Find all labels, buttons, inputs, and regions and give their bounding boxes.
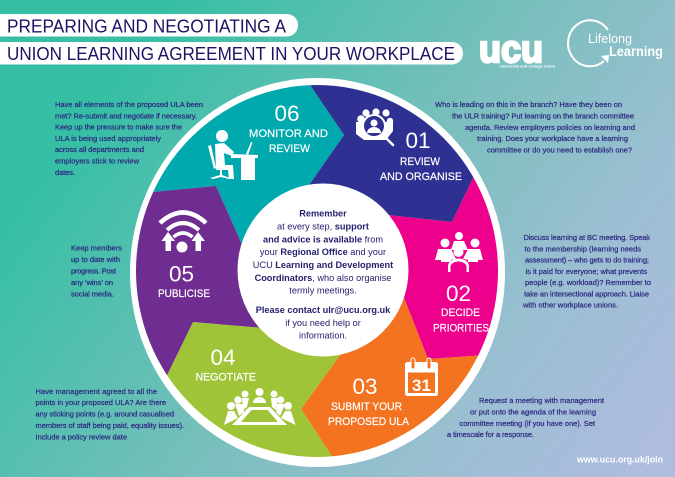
text: negotiate advice: members of staff being paid, equality issues). <box>36 421 184 430</box>
text: review and organise advice <box>435 100 635 154</box>
text: submit proposed ULA advice: or put onto the agenda of the learning <box>470 407 596 416</box>
text: decide priorities advice: take an intersectional approach. Liaise <box>524 290 649 299</box>
centre circle: information. <box>299 330 347 340</box>
text: review and organise advice: training. Does your workplace have a learning <box>477 134 628 143</box>
title: PREPARING AND NEGOTIATING A <box>7 16 286 37</box>
label: 03 submit your proposed ULA: SUBMIT YOUR <box>331 401 402 413</box>
icon: wifi broadcast <box>160 212 206 252</box>
label: 02 decide priorities <box>433 281 489 334</box>
text: monitor and review advice: dates. <box>55 168 75 177</box>
text: review and organise advice: committee or do you need to establish one? <box>487 145 632 154</box>
text: publicise advice: any ‘wins’ on <box>71 278 113 287</box>
text: submit proposed ULA advice: a timescale for a response. <box>447 430 534 439</box>
label: 02 decide priorities: DECIDE <box>441 307 480 319</box>
text: submit proposed ULA advice: committee meeting (if you have one). Set <box>460 419 596 428</box>
text: negotiate advice: any sticking points (e.g. around casualised <box>36 410 174 419</box>
icon: calendar 31: 31 <box>412 376 431 395</box>
centre circle: Please contact ulr@ucu.org.uk <box>256 305 391 315</box>
label: 05 publicise <box>158 262 210 300</box>
text: publicise advice: social media. <box>71 289 114 298</box>
centre circle: termly meetings. <box>289 286 357 296</box>
label: 06 monitor and review <box>249 101 328 155</box>
text: negotiate advice: points in your proposed ULA? Are there <box>36 398 166 407</box>
label: 03 submit your proposed ULA <box>328 374 410 428</box>
text: publicise advice <box>71 244 122 298</box>
label: 02 decide priorities: PRIORITIES <box>433 322 489 334</box>
text: decide priorities advice: to the membership (learning needs <box>524 244 641 254</box>
centre circle <box>238 184 408 356</box>
centre circle: Coordinators, who also organise <box>255 273 391 283</box>
segment: 04 negotiate <box>167 322 340 457</box>
centre circle: your Regional Office and your <box>260 247 386 257</box>
label: 01 review and organise: REVIEW <box>400 156 441 168</box>
text: monitor and review advice: employers stick to review <box>55 156 140 166</box>
title <box>0 14 463 64</box>
label: 03 submit your proposed ULA: 03 <box>352 374 378 399</box>
label: 06 monitor and review: MONITOR AND <box>249 128 328 140</box>
text: monitor and review advice <box>55 100 203 177</box>
text: monitor and review advice: Keep up the pressure to make sure the <box>55 123 182 132</box>
text: monitor and review advice: ULA is being used appropriately <box>55 134 161 143</box>
centre circle: and advice is available from <box>263 234 383 244</box>
label: 01 review and organise: 01 <box>405 128 431 153</box>
text: submit proposed ULA advice: Request a meeting with management <box>479 396 605 405</box>
text: decide priorities advice: assessment) – who gets to do training; <box>525 256 649 265</box>
process wheel <box>130 78 505 467</box>
label: 01 review and organise: AND ORGANISE <box>380 171 462 183</box>
text: publicise advice: progress. Post <box>71 266 117 276</box>
centre circle: at every step, support <box>277 221 369 231</box>
label: 04 negotiate: 04 <box>210 345 236 370</box>
text: decide priorities advice: Discuss learning at BC meeting. Speak <box>524 233 650 242</box>
text: publicise advice: Keep members <box>71 244 122 253</box>
icon: person at desk <box>208 130 258 180</box>
text: decide priorities advice: is it paid for everyone; what prevents <box>526 267 647 276</box>
text: decide priorities advice <box>522 233 651 310</box>
label: 05 publicise: PUBLICISE <box>158 288 210 300</box>
logo: UCU: ucu <box>479 29 543 71</box>
label: 06 monitor and review: REVIEW <box>269 143 311 155</box>
segment: 06 monitor and review <box>153 85 344 244</box>
text: negotiate advice: Have management agreed to all the <box>36 387 157 396</box>
text: review and organise advice: Who is leading on this in the branch? Have they been on <box>435 100 622 109</box>
web address: www.ucu.org.uk/join <box>576 455 663 466</box>
icon: magnifier over people <box>356 108 393 145</box>
text: publicise advice: up to date with <box>71 255 120 264</box>
segment: 01 review and organise <box>309 85 474 222</box>
label: 02 decide priorities: 02 <box>446 281 471 306</box>
text: submit proposed ULA advice <box>447 396 605 439</box>
logo: UCU: University and College Union <box>500 64 555 68</box>
text: negotiate advice: Include a policy review date <box>36 432 127 441</box>
text: decide priorities advice: with other workplace unions. <box>522 301 618 310</box>
title: UNION LEARNING AGREEMENT IN YOUR WORKPLACE <box>7 43 455 64</box>
logo: Lifelong Learning: Learning <box>609 44 663 59</box>
label: 06 monitor and review: 06 <box>274 101 300 126</box>
centre circle: Remember <box>299 209 347 219</box>
segment: 03 submit your proposed ULA <box>301 298 478 456</box>
label: 05 publicise: 05 <box>169 262 194 287</box>
text: negotiate advice <box>36 387 184 441</box>
text: review and organise advice: agenda. Review employers policies on learning and <box>465 123 635 132</box>
logo: Lifelong Learning <box>568 20 663 66</box>
label: 01 review and organise <box>380 128 462 183</box>
label: 04 negotiate: NEGOTIATE <box>195 372 256 384</box>
text: monitor and review advice: met? Re-submit and negotiate if necessary. <box>55 111 197 120</box>
logo: Lifelong Learning: Lifelong <box>588 31 632 46</box>
icon: negotiating table <box>224 388 296 425</box>
label: 03 submit your proposed ULA: PROPOSED ULA <box>328 416 410 428</box>
text: monitor and review advice: Have all elements of the proposed ULA been <box>55 100 203 109</box>
segment: 05 publicise <box>136 186 260 375</box>
icon: people round a table <box>435 232 483 272</box>
label: 04 negotiate <box>195 345 256 384</box>
centre circle: if you need help or <box>285 318 361 328</box>
text: decide priorities advice: people (e.g. workload)? Remember to <box>525 278 651 287</box>
segment: 02 decide priorities <box>389 177 498 359</box>
icon: calendar 31 <box>405 358 438 396</box>
text: review and organise advice: the ULR training? Put learning on the branch committee <box>452 111 634 120</box>
text: monitor and review advice: across all departments and <box>55 145 144 154</box>
centre circle: UCU Learning and Development <box>253 260 393 270</box>
